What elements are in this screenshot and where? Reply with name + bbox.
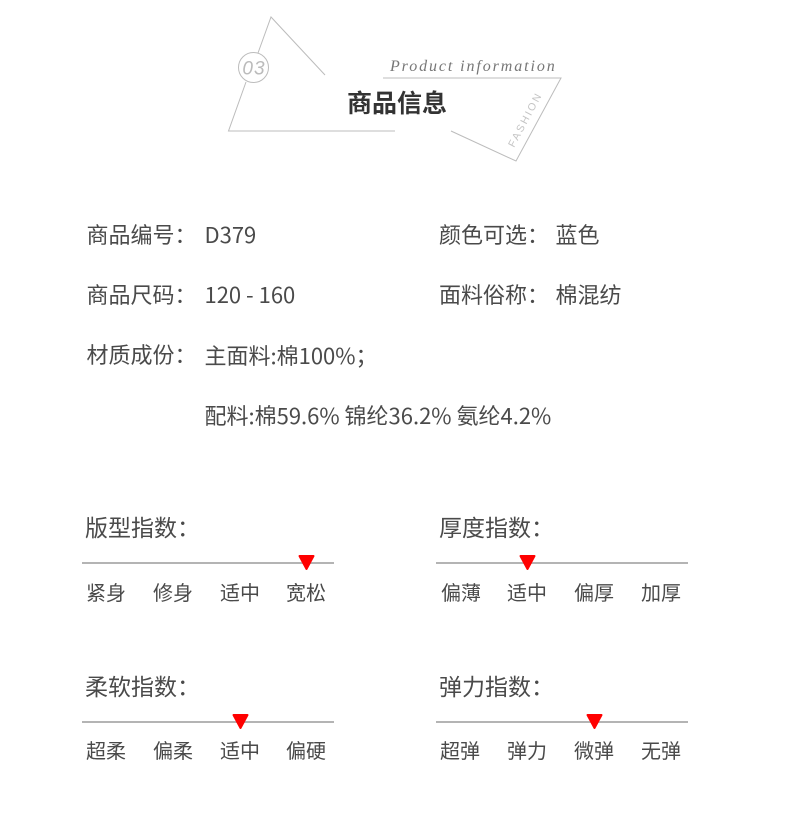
label: product code: 商品编号： <box>86 218 197 250</box>
option: 修身 <box>153 577 193 606</box>
marker <box>232 714 248 729</box>
right parallelogram outline <box>383 78 561 161</box>
index: elasticity <box>436 668 688 764</box>
product details <box>86 218 622 431</box>
option: 适中 <box>220 735 260 764</box>
heading: 厚度指数： <box>439 509 554 543</box>
index: fit <box>82 509 334 606</box>
index: softness <box>82 668 334 764</box>
option: 无弹 <box>641 735 681 764</box>
option: 紧身 <box>86 577 126 606</box>
title: 商品信息 <box>347 84 447 120</box>
option: 超柔 <box>86 735 126 764</box>
value: size: 120 - 160 <box>204 278 295 310</box>
label: material: 材质成份： <box>86 338 197 370</box>
option: 偏厚 <box>574 577 614 606</box>
value: main material: 主面料:棉100%； <box>204 339 378 371</box>
option: 偏硬 <box>286 735 326 764</box>
header graphic <box>228 16 562 162</box>
label: size: 商品尺码： <box>86 278 197 310</box>
heading: 柔软指数： <box>85 668 200 702</box>
marker <box>520 555 536 570</box>
option: 偏薄 <box>441 577 481 606</box>
option: 适中 <box>507 577 547 606</box>
option: 宽松 <box>286 577 326 606</box>
marker <box>298 555 314 570</box>
option: 超弹 <box>440 735 480 764</box>
value: secondary material: 配料:棉59.6% 锦纶36.2% 氨纶4.2% <box>204 399 551 431</box>
value: product code: D379 <box>204 218 256 250</box>
left triangle outline <box>228 17 395 131</box>
label: color: 颜色可选： <box>439 218 549 250</box>
heading: 版型指数： <box>85 509 200 543</box>
option: 适中 <box>220 577 260 606</box>
option: 弹力 <box>507 735 547 764</box>
script subtitle: Product information <box>389 58 557 75</box>
index: thickness <box>436 509 688 606</box>
heading: 弹力指数： <box>439 668 554 702</box>
number 03: 03 <box>242 58 266 80</box>
option: 微弹 <box>574 735 614 764</box>
fashion label: FASHION <box>506 90 545 149</box>
marker <box>586 714 602 729</box>
option: 偏柔 <box>153 735 193 764</box>
value: fabric: 棉混纺 <box>556 278 622 310</box>
label: fabric: 面料俗称： <box>439 278 549 310</box>
option: 加厚 <box>641 577 681 606</box>
value: color: 蓝色 <box>556 218 600 250</box>
